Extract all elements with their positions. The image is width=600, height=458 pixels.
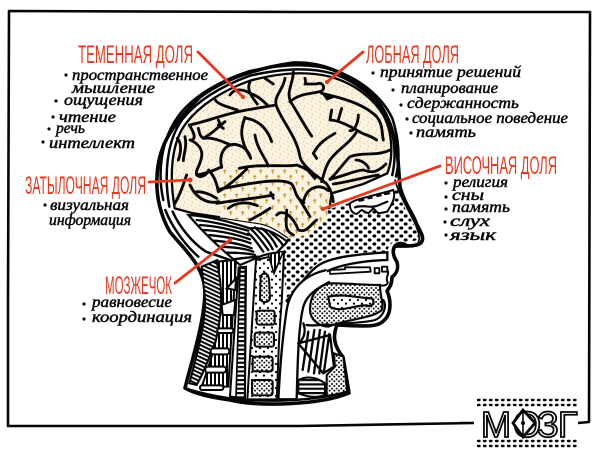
- list: [82, 294, 192, 326]
- cerebellum: [188, 215, 287, 265]
- dura ladder: [236, 268, 245, 397]
- arrow: cerebellum: [175, 238, 232, 283]
- list: мышление: [71, 80, 155, 97]
- list: информация: [49, 212, 131, 229]
- list: планирование: [401, 80, 498, 97]
- label: frontal lobe: [366, 41, 568, 141]
- list: религия: [452, 174, 508, 191]
- list: пространственное: [72, 67, 208, 84]
- head illustration: [157, 63, 423, 404]
- list: [43, 197, 131, 229]
- nasal cavity band: [287, 252, 387, 310]
- arrow: parietal: [198, 52, 245, 99]
- chin dots: [327, 353, 347, 396]
- list: интеллект: [49, 135, 135, 152]
- list: принятие решений: [380, 64, 521, 81]
- tongue and mouth floor: [310, 283, 382, 327]
- list: [41, 67, 208, 152]
- label: occipital lobe: [25, 172, 146, 229]
- list: память: [416, 124, 476, 141]
- hyoid stripes: [298, 378, 325, 397]
- arrow: temporal: [321, 166, 440, 211]
- text: ЗАТЫЛОЧНАЯ ДОЛЯ: [25, 172, 146, 200]
- logo letters: МОЗГ: [481, 404, 578, 445]
- back neck muscle: [189, 260, 225, 385]
- logo: [478, 400, 578, 446]
- list: [371, 64, 568, 141]
- dotted tissue: [280, 188, 419, 298]
- cerebellum stripes: [197, 220, 283, 259]
- nasal sinus: [350, 190, 394, 214]
- list: ощущения: [64, 92, 143, 109]
- list: сдержанность: [407, 95, 519, 112]
- list: чтение: [59, 109, 116, 126]
- list: речь: [55, 120, 85, 137]
- jaw lower lines: [185, 325, 347, 401]
- skull inner ring two: [167, 69, 394, 207]
- brainstem cone: [267, 252, 283, 273]
- logo dotted rows: [478, 400, 576, 446]
- spinal cord strip: [230, 267, 246, 398]
- arrow: frontal: [325, 52, 363, 84]
- throat band: [278, 270, 330, 399]
- list: память: [452, 199, 510, 216]
- list: язык: [449, 227, 497, 244]
- lips: [380, 270, 388, 286]
- brain folds: [175, 72, 390, 235]
- palate: [330, 267, 387, 274]
- list: [443, 174, 510, 244]
- label: parietal lobe: [41, 41, 208, 152]
- nostril: [393, 242, 409, 248]
- inner facial line: [395, 180, 419, 242]
- list: равновесие: [91, 294, 172, 311]
- label: cerebellum: МОЗЖЕЧОК: [105, 272, 172, 300]
- brain surface: [172, 73, 391, 243]
- list: визуальная: [50, 197, 129, 214]
- jaw muscle fan: [298, 323, 334, 373]
- process bones: [200, 278, 236, 390]
- list: координация: [92, 309, 192, 326]
- heading: ЛОБНАЯ ДОЛЯ: [366, 41, 459, 69]
- frontal wedge: [321, 92, 337, 101]
- heading: ТЕМЕННАЯ ДОЛЯ: [78, 41, 193, 69]
- skull inner rings: [161, 65, 398, 200]
- temporal lobe shading: [217, 167, 328, 243]
- list: социальное поведение: [412, 110, 568, 127]
- skull and skin silhouette: [157, 63, 423, 404]
- vertebrae: [252, 273, 275, 395]
- list: слух: [450, 213, 490, 230]
- label: temporal lobe: [443, 152, 557, 244]
- cervical processes: [202, 260, 236, 387]
- facial tissue, nose and mouth, drawn on a 3x grid: [280, 180, 419, 327]
- skull base rings: [165, 210, 230, 260]
- arrow: occipital: [149, 178, 192, 182]
- logo diamond: [513, 410, 535, 437]
- spinal column: [247, 253, 284, 399]
- sinus detail: [355, 193, 389, 207]
- jaw inner line: [332, 300, 385, 325]
- neck, cerebellum and spine, drawn on a 3x grid: [165, 210, 347, 401]
- label: cerebellum: [82, 272, 192, 326]
- central junction blot: [303, 167, 318, 181]
- list: сны: [452, 187, 484, 204]
- tongue: [328, 296, 373, 309]
- brain, drawn on a 3x grid: [161, 65, 398, 243]
